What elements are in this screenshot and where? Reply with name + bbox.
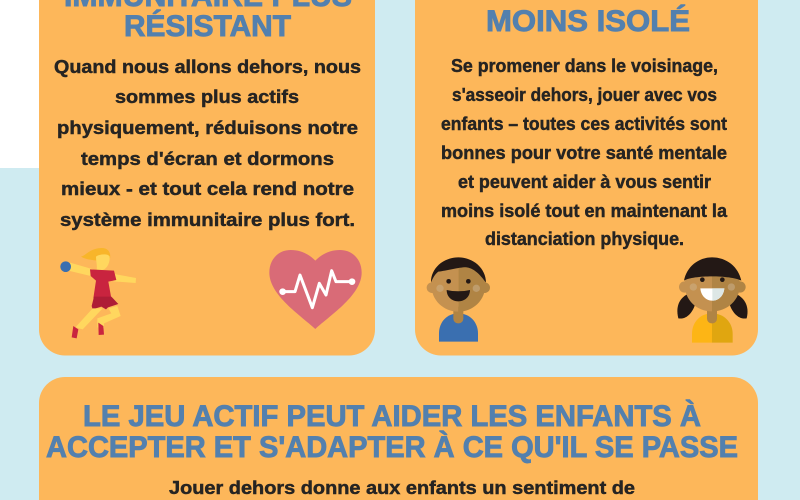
panel: immune system: [39, 0, 375, 356]
heading: less isolated: MOINS ISOLÉ: [486, 4, 690, 38]
icon: smiling girl: [677, 257, 748, 343]
text block: immune system: physiquement, réduisons notre: [57, 117, 358, 138]
text block: less isolated: s'asseoir dehors, jouer avec vos: [452, 85, 717, 105]
text block: less isolated: bonnes pour votre santé mentale: [441, 143, 727, 163]
text block: less isolated: enfants – toutes ces activités sont: [441, 114, 727, 134]
icon: smiling boy: [427, 257, 490, 342]
heading: active play: ACCEPTER ET S'ADAPTER À CE QU'IL SE PASSE: [46, 430, 738, 464]
heading: active play: LE JEU ACTIF PEUT AIDER LES ENFANTS À: [83, 399, 701, 433]
text block: less isolated: distanciation physique.: [485, 229, 684, 249]
heading: immune system: [64, 0, 352, 43]
panel: active play: [39, 377, 758, 500]
text block: less isolated: [441, 56, 728, 249]
text block: less isolated: moins isolé tout en maintenant la: [441, 201, 728, 221]
text block: immune system: mieux - et tout cela rend notre: [61, 178, 354, 199]
text block: immune system: sommes plus actifs: [115, 86, 299, 107]
icon: girl throwing a ball: [60, 248, 136, 338]
icon: heart with pulse: [269, 250, 362, 329]
text block: less isolated: Se promener dans le voisinage,: [451, 56, 718, 76]
text block: immune system: système immunitaire plus fort.: [60, 209, 355, 230]
text block: immune system: temps d'écran et dormons: [81, 148, 334, 169]
panel: less isolated: [415, 0, 758, 356]
heading: active play: [46, 399, 738, 464]
heading: immune system: RÉSISTANT: [124, 9, 291, 43]
text block: immune system: Quand nous allons dehors, nous: [54, 56, 361, 77]
text block: immune system: [54, 56, 361, 230]
text block: less isolated: et peuvent aider à vous sentir: [458, 172, 711, 192]
text block: active play: Jouer dehors donne aux enfants un sentiment de: [169, 478, 635, 498]
